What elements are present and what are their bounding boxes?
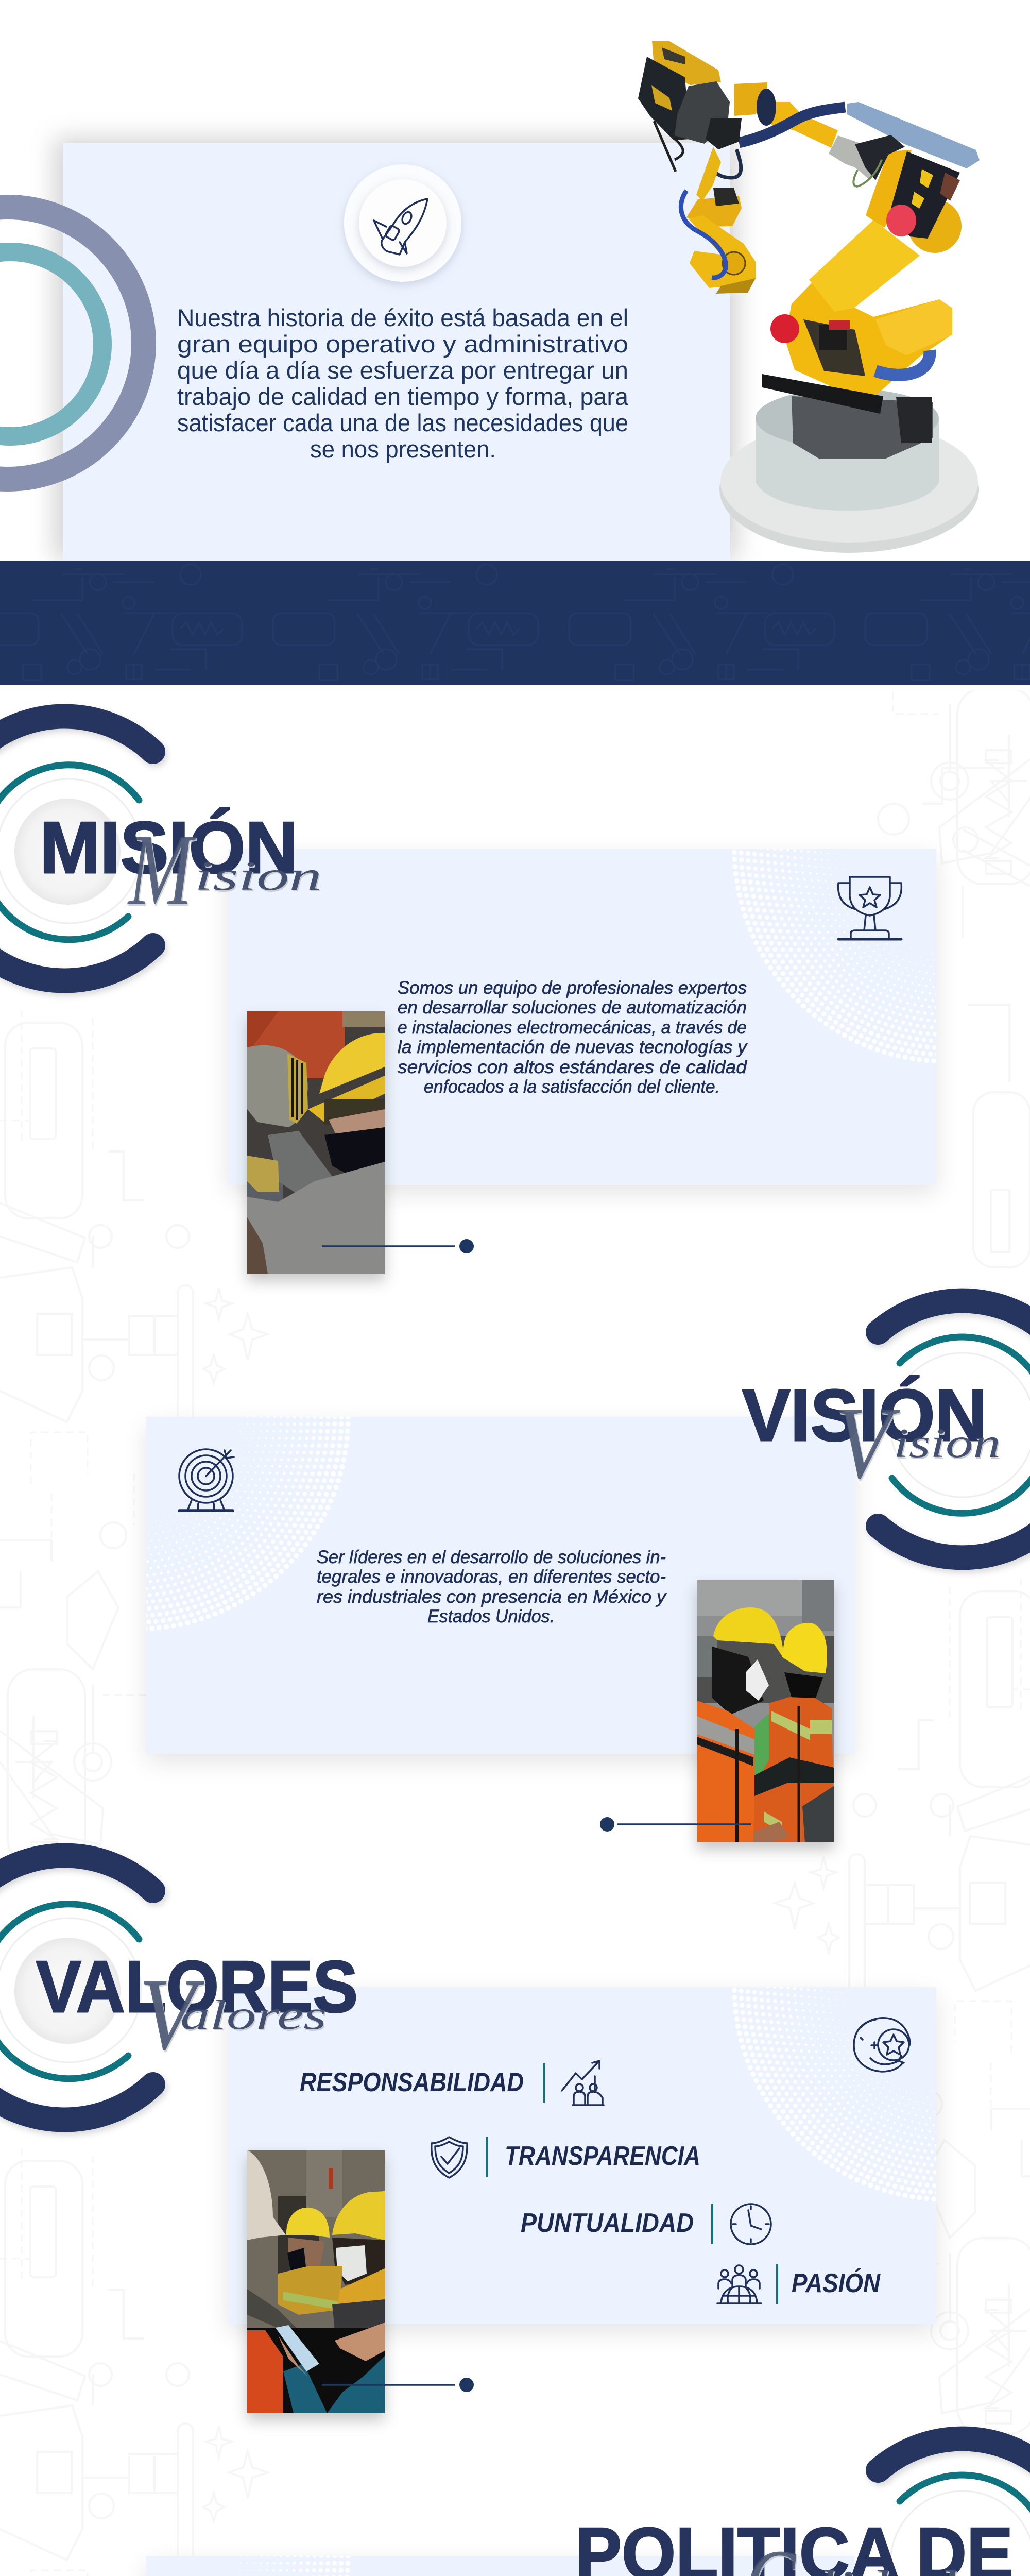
text block: mision: e instalaciones electromecánicas, a través de	[398, 1018, 747, 1038]
heading: VALORES: VALORES	[36, 1946, 358, 2028]
panel: valores card	[222, 1987, 941, 2338]
panel: vision card	[141, 1417, 860, 1767]
text block: hero intro: se nos presenten.	[310, 435, 496, 463]
rings: politica	[878, 2439, 1030, 2576]
navy band	[0, 561, 1030, 685]
text block: mision: enfocados a la satisfacción del cliente.	[424, 1077, 720, 1097]
text block: hero intro: trabajo de calidad en tiempo y forma, para	[177, 383, 629, 410]
panel: mision card	[222, 849, 941, 1198]
section: Visión	[141, 1288, 1030, 1857]
value: responsabilidad	[300, 2061, 604, 2105]
text block: mision: en desarrollar soluciones de automatización	[398, 997, 747, 1018]
connector: valores	[322, 2378, 474, 2392]
robot: wrist and tool	[638, 41, 776, 172]
heading script: Vision	[834, 1386, 1001, 1500]
heading script: Vision: V	[834, 1386, 900, 1500]
text block: mision: Somos un equipo de profesionales expertos	[398, 978, 747, 998]
text block: mision: servicios con altos estándares de calidad	[398, 1057, 748, 1077]
section: Politica de Calidad	[143, 2427, 1030, 2576]
robot arm illustration	[638, 41, 980, 553]
text block: hero intro: que día a día se esfuerza por entregar un	[177, 357, 628, 384]
connector: mision	[322, 1239, 474, 1253]
robot: lower body	[762, 280, 952, 414]
list: values	[300, 2061, 881, 2304]
value: pasion	[717, 2264, 881, 2304]
text block: hero intro: satisfacer cada una de las necesidades que	[177, 409, 628, 436]
photo: workers checking a phone	[247, 2150, 385, 2413]
text block: vision: res industriales con presencia en México y	[317, 1587, 667, 1607]
rings: valores	[0, 1855, 153, 2120]
value: pasion: PASIÓN	[792, 2268, 881, 2298]
text block: vision: Estados Unidos.	[427, 1606, 555, 1626]
value: puntualidad: PUNTUALIDAD	[521, 2208, 694, 2238]
heading script: Valores: alores	[180, 1993, 327, 2038]
photo: worker with yellow helmet and gloves	[247, 1011, 385, 1274]
text block: hero intro: Nuestra historia de éxito está basada en el	[177, 304, 628, 331]
icon: trophy	[838, 877, 901, 939]
value: responsabilidad: RESPONSABILIDAD	[300, 2067, 524, 2097]
panel: politica card	[143, 2556, 854, 2576]
heading script: Valores: V	[139, 1958, 205, 2072]
value: transparencia: TRANSPARENCIA	[505, 2141, 700, 2171]
text block: hero intro: gran equipo operativo y administrativo	[177, 330, 628, 358]
robot: base dish	[719, 388, 979, 553]
icon: star with circular arrows	[854, 2018, 910, 2072]
text block: mision	[398, 978, 748, 1097]
text block: vision: tegrales e innovadoras, en diferentes secto-	[317, 1567, 666, 1587]
connector: vision	[600, 1817, 751, 1832]
text block: hero intro	[177, 304, 629, 463]
rings: mision	[0, 716, 153, 981]
text block: vision	[317, 1547, 667, 1626]
heading script: Calidad	[744, 2529, 956, 2576]
robot: cylinder and controls	[739, 102, 980, 187]
heading script: Valores	[139, 1958, 327, 2072]
value: puntualidad	[521, 2204, 771, 2244]
heading script: Mision: ision	[195, 854, 322, 899]
icon: rocket badge	[344, 164, 461, 282]
hero backdrop cover	[0, 0, 1030, 690]
robot: small secondary arm	[681, 147, 756, 294]
icon: target	[179, 1449, 234, 1511]
text block: mision: la implementación de nuevas tecnologías y	[398, 1037, 748, 1057]
heading script: Vision: ision	[894, 1421, 1001, 1466]
decorative rings hero	[0, 207, 144, 479]
robot: upper arm and motor	[809, 150, 962, 312]
rings: vision	[878, 1301, 1030, 1557]
heading script: Mision	[127, 813, 322, 927]
value: transparencia	[432, 2137, 700, 2178]
section: Misión	[0, 637, 1030, 1274]
text block: vision: Ser líderes en el desarrollo de soluciones in-	[317, 1547, 666, 1567]
heading script: Mision: M	[127, 813, 196, 927]
panel: hero intro	[55, 138, 737, 561]
photo: two workers in orange jackets	[697, 1580, 834, 1842]
section: Valores	[0, 1775, 1030, 2413]
heading: VISIÓN: VISIÓN	[742, 1375, 987, 1456]
heading: MISIÓN: MISIÓN	[40, 807, 298, 889]
